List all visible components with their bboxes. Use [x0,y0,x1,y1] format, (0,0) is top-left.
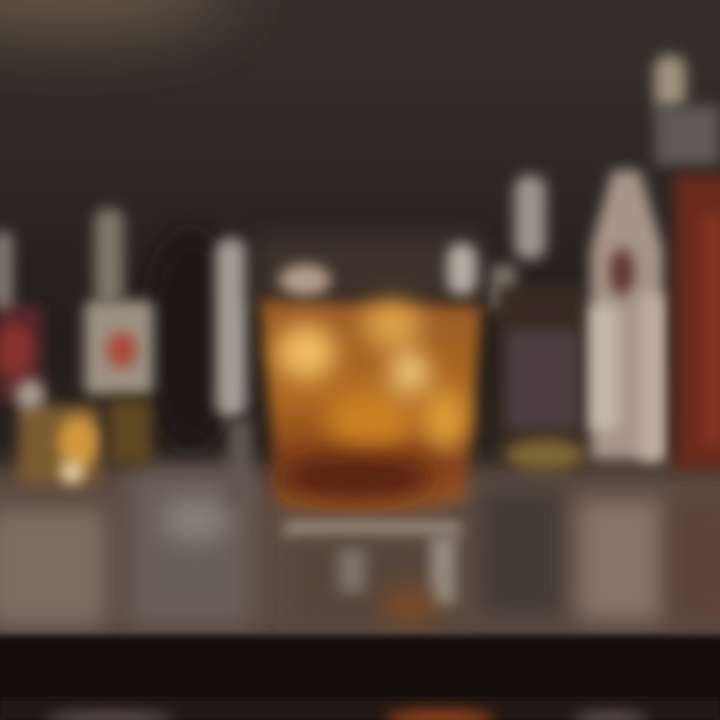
top ice and rim highlights [279,264,331,296]
far-right bottle [654,55,720,470]
glass reflection [290,540,460,625]
small glass, left [15,379,100,485]
bar counter with reflections [0,465,720,645]
tall highlight, left of glass [215,238,252,505]
far-left red bottle [0,232,42,400]
whiskey glass [256,235,482,625]
white bottle [590,170,664,460]
ice cube highlights [276,301,467,450]
glass rim [256,235,480,305]
dark bottle, right of glass [490,175,587,471]
left bottle [84,208,154,465]
glass base [285,522,460,536]
dark base of liquid [277,456,433,500]
whiskey body [260,300,482,514]
bottom reflection strip [0,699,720,720]
background wall [0,0,720,480]
black bar edge [0,636,720,698]
